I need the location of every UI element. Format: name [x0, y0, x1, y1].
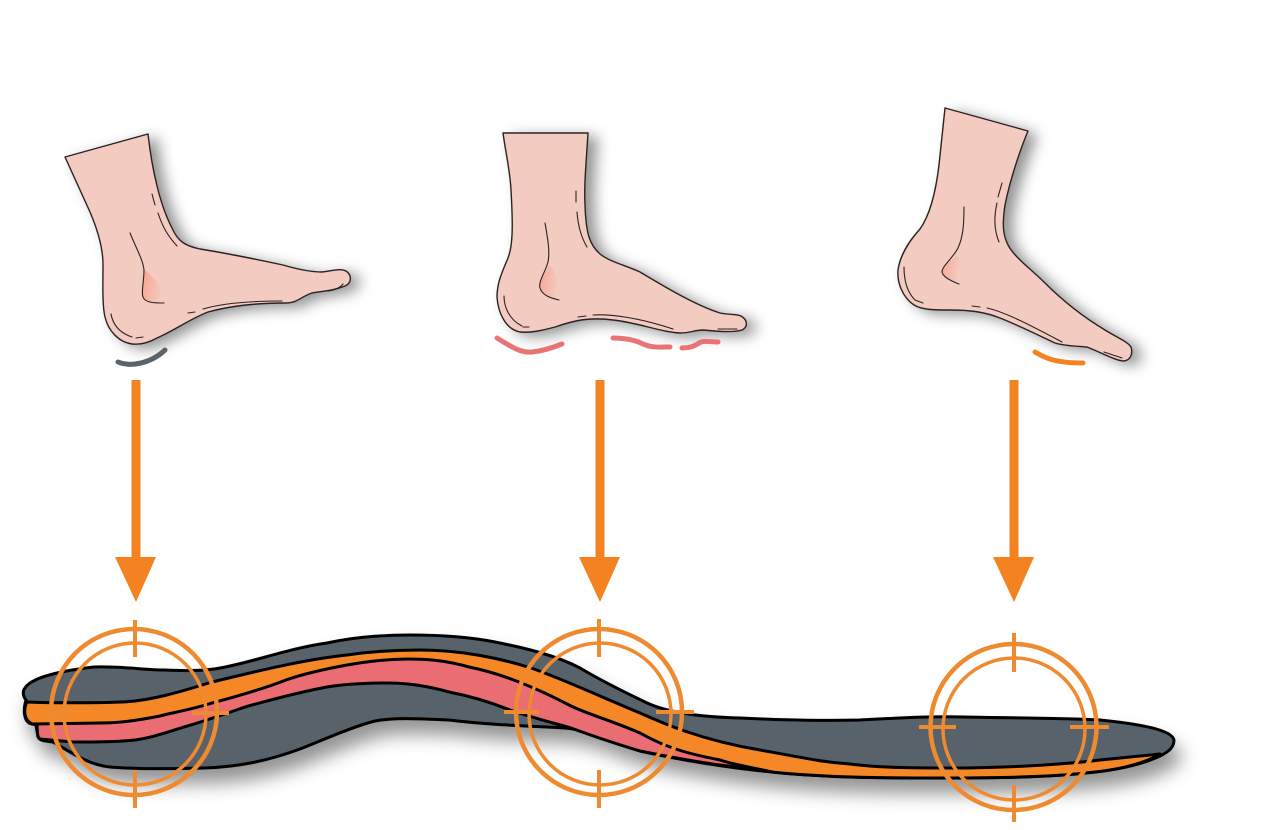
insole orange support layer [25, 650, 1160, 778]
foot 3 outline [898, 108, 1132, 361]
insole pink cushion layer [37, 655, 744, 767]
target: midfoot zone [504, 619, 694, 808]
foot 1 contour lines [111, 194, 343, 338]
pressure mark: forefoot [1035, 352, 1083, 363]
insole cross-section [23, 635, 1174, 778]
target: heel zone [41, 620, 229, 808]
pressure marks: whole sole [497, 338, 718, 352]
arrow: forefoot to insole [993, 380, 1034, 602]
foot 3 contour lines [904, 183, 1122, 358]
foot 1 ankle bone highlight [143, 270, 165, 303]
foot 1: heel strike [65, 134, 350, 344]
foot 2 contour lines [504, 191, 737, 329]
foot 1 outline [65, 134, 350, 344]
arrow: heel to insole [115, 380, 156, 602]
pressure mark: heel [118, 350, 165, 364]
foot 2: flat stance [497, 133, 746, 333]
foot 3 ankle bone highlight [942, 255, 961, 284]
foot 3: toe off [898, 108, 1132, 361]
arrow: sole to insole [579, 380, 620, 602]
insole base layer [23, 635, 1174, 778]
target: forefoot zone [919, 633, 1109, 822]
foot 2 outline [497, 133, 746, 333]
foot 2 ankle bone highlight [540, 265, 560, 300]
